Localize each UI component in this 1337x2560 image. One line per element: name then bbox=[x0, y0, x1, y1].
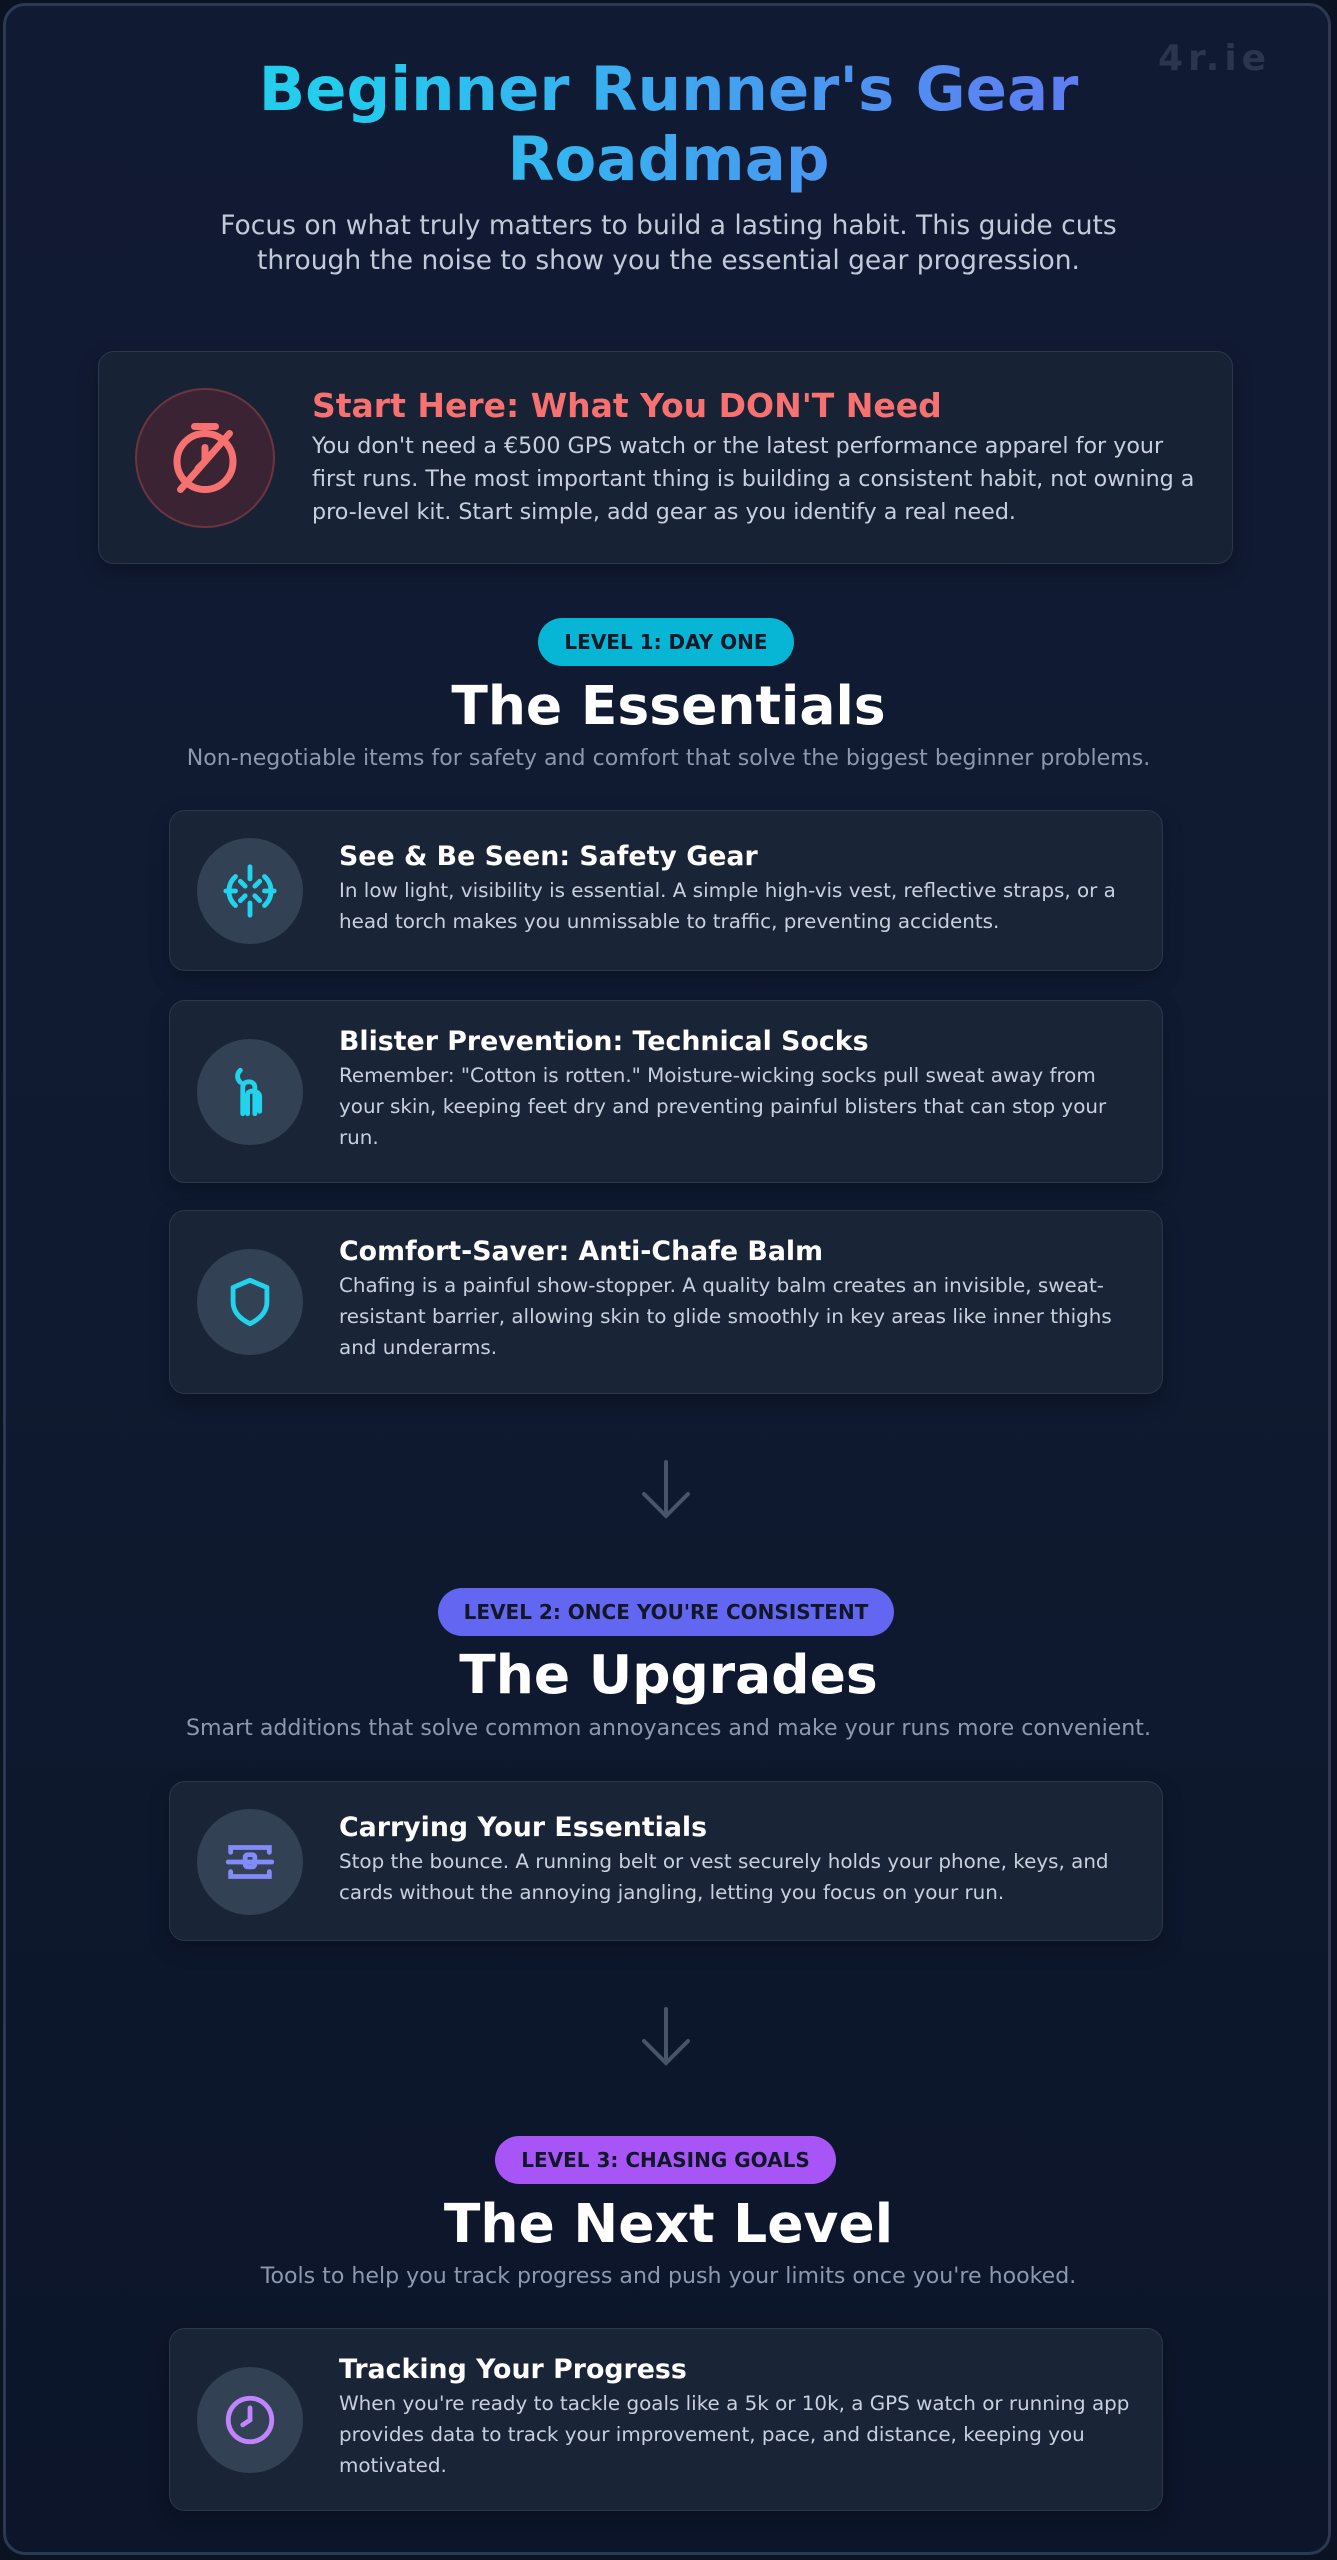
badge: level 2 bbox=[438, 1588, 894, 1636]
subtitle: through the noise to show you the essential gear progression. bbox=[257, 245, 1080, 276]
card: safety gear: See & Be Seen: Safety Gear bbox=[339, 841, 758, 872]
icon: crossed watch bbox=[135, 388, 275, 528]
icon: belt bbox=[197, 1809, 303, 1915]
card: safety gear: In low light, visibility is essential. A simple high-vis vest, reflective straps, or a head torch makes you unmissable to traffic, preventing accidents. bbox=[339, 879, 1116, 933]
card: safety gear bbox=[169, 810, 1163, 971]
card: tracking: Tracking Your Progress bbox=[339, 2354, 687, 2385]
icon: shield bbox=[197, 1249, 303, 1355]
card: socks bbox=[169, 1000, 1163, 1183]
badge: level 3: LEVEL 3: CHASING GOALS bbox=[521, 2148, 810, 2172]
card: carrying: Stop the bounce. A running belt or vest securely holds your phone, keys, and cards without the annoying jangling, letting you focus on your run. bbox=[339, 1850, 1109, 1904]
title: Roadmap bbox=[507, 124, 830, 195]
subheading upgrades: Smart additions that solve common annoyances and make your runs more convenient. bbox=[186, 1715, 1151, 1741]
heading: essentials: The Essentials bbox=[451, 674, 886, 737]
warning text: You don't need a €500 GPS watch or the latest performance apparel for your first runs. The most important thing is building a consistent habit, not owning a pro-level kit. Start simple, add gear as you identify a real need. bbox=[312, 433, 1194, 525]
icon: watch bbox=[197, 2367, 303, 2473]
arrow 2 bbox=[642, 2007, 690, 2066]
icon: sock bbox=[197, 1039, 303, 1145]
card: carrying: Carrying Your Essentials bbox=[339, 1812, 707, 1843]
badge: level 1 bbox=[538, 618, 794, 666]
card: tracking bbox=[169, 2328, 1163, 2511]
card: balm: Comfort-Saver: Anti-Chafe Balm bbox=[339, 1236, 823, 1267]
subtitle bbox=[220, 210, 1117, 276]
card: balm bbox=[169, 1210, 1163, 1394]
subtitle: Focus on what truly matters to build a lasting habit. This guide cuts bbox=[220, 210, 1117, 241]
heading: upgrades: The Upgrades bbox=[459, 1643, 878, 1706]
subheading next level: Tools to help you track progress and push your limits once you're hooked. bbox=[261, 2263, 1076, 2289]
panel: what you don't need bbox=[98, 351, 1233, 564]
arrow 1 bbox=[642, 1460, 690, 1519]
badge: level 3 bbox=[495, 2136, 836, 2184]
card: socks: Blister Prevention: Technical Socks bbox=[339, 1026, 869, 1057]
subheading essentials: Non-negotiable items for safety and comfort that solve the biggest beginner problems. bbox=[187, 745, 1150, 771]
badge: level 2: LEVEL 2: ONCE YOU'RE CONSISTENT bbox=[464, 1600, 868, 1624]
badge: level 1: LEVEL 1: DAY ONE bbox=[564, 630, 768, 654]
title bbox=[0, 55, 1337, 195]
watermark: 4r.ie bbox=[1158, 38, 1271, 79]
card: balm: Chafing is a painful show-stopper. A quality balm creates an invisible, sweat-resistant barrier, allowing skin to glide smoothly in key areas like inner thighs and underarms. bbox=[339, 1274, 1112, 1359]
card: tracking: When you're ready to tackle goals like a 5k or 10k, a GPS watch or running app provides data to track your improvement, pace, and distance, keeping you motivated. bbox=[339, 2392, 1129, 2477]
warning text bbox=[312, 386, 1194, 525]
icon: light bbox=[197, 838, 303, 944]
card: socks: Remember: "Cotton is rotten." Moisture-wicking socks pull sweat away from your skin, keeping feet dry and preventing painful blisters that can stop your run. bbox=[339, 1064, 1106, 1149]
card: carrying bbox=[169, 1781, 1163, 1941]
warning text: Start Here: What You DON'T Need bbox=[312, 386, 942, 425]
heading: next level: The Next Level bbox=[444, 2192, 893, 2255]
title: Beginner Runner's Gear bbox=[259, 54, 1078, 125]
